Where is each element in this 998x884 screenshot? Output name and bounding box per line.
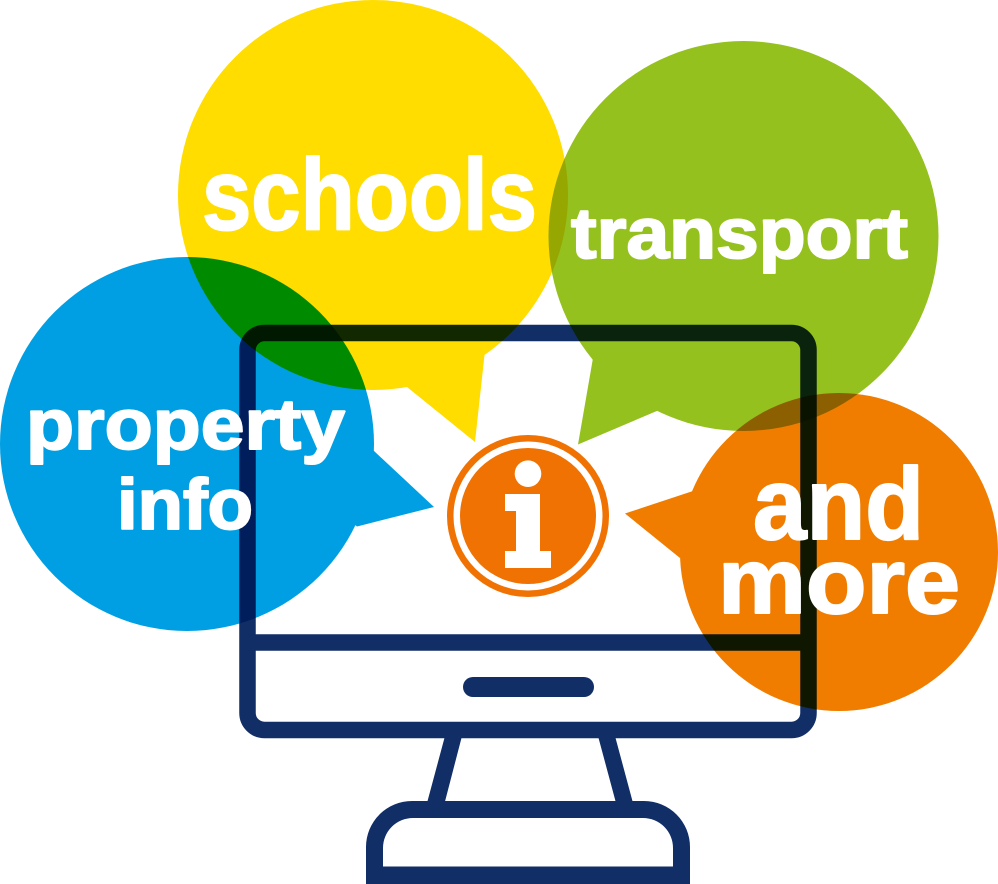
speech bubble: schools (yellow) — [178, 0, 568, 442]
label: and: and — [753, 447, 924, 561]
monitor button pill — [463, 677, 594, 697]
label: transport: transport — [571, 195, 908, 274]
computer monitor outline — [248, 333, 808, 884]
label: info: info — [117, 466, 253, 545]
speech bubble: transport (green) — [548, 41, 938, 444]
label: more: more — [718, 529, 960, 633]
speech bubble: property info (blue) — [0, 257, 434, 631]
label: property: property — [26, 386, 346, 465]
monitor stand legs — [427, 736, 633, 803]
speech bubble: and more (orange) — [625, 393, 998, 711]
monitor stand base — [366, 801, 690, 884]
label: schools: schools — [202, 140, 537, 252]
icon: information symbol — [447, 435, 609, 597]
